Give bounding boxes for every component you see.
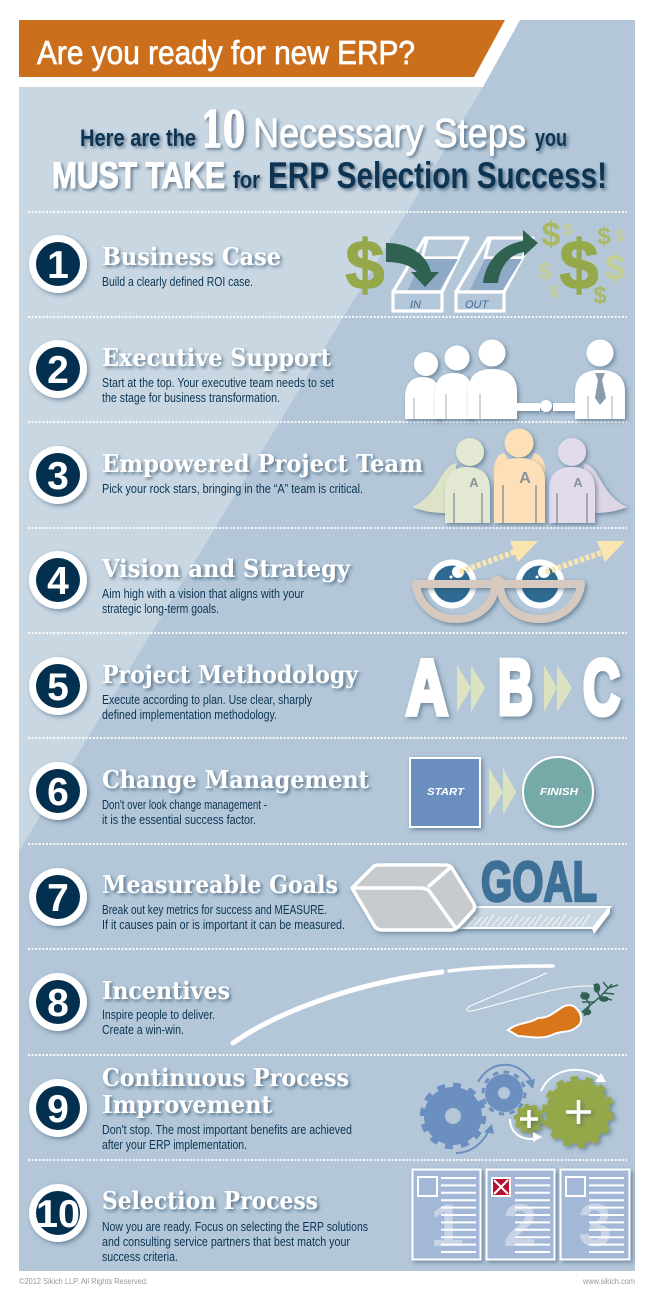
title banner xyxy=(19,20,505,77)
step 2 text: 2 xyxy=(47,349,69,392)
step 9 text: after your ERP implementation. xyxy=(102,1138,247,1152)
icon: superhero team xyxy=(412,428,627,523)
icon: money in and out: OUT xyxy=(465,299,490,311)
step 6 text xyxy=(29,762,369,827)
icon: money in and out: $ xyxy=(597,223,611,250)
step 3 text: 3 xyxy=(47,455,69,498)
step 5 text: Execute according to plan. Use clear, sharply xyxy=(102,693,313,707)
icon: start to finish xyxy=(410,757,593,827)
heading: 10 necessary steps: for xyxy=(233,167,260,194)
step 2 text: the stage for business transformation. xyxy=(102,391,280,405)
step 10 text: 10 xyxy=(36,1193,80,1236)
step 7 text: 7 xyxy=(47,877,69,920)
heading: 10 necessary steps xyxy=(52,100,607,196)
step 5 text: Project Methodology xyxy=(102,660,359,689)
icon: money in and out: $ xyxy=(346,226,384,304)
step 8 text: Create a win-win. xyxy=(102,1023,184,1037)
step 10 text: Selection Process xyxy=(102,1186,318,1215)
step 5 text: defined implementation methodology. xyxy=(102,708,277,722)
icon: money in and out: $ xyxy=(616,228,625,245)
step 4 text: Aim high with a vision that aligns with your xyxy=(102,587,304,601)
step 1 text: 1 xyxy=(47,244,69,287)
icon: money in and out: IN xyxy=(410,299,421,311)
step 8 text xyxy=(29,973,230,1037)
icon: start to finish: START xyxy=(427,787,465,798)
step 4 text: Vision and Strategy xyxy=(101,554,351,583)
icon: gears with plus signs xyxy=(422,1065,612,1153)
step 7 text xyxy=(29,868,345,932)
step 8 text: 8 xyxy=(47,982,69,1025)
icon: three documents: 3 xyxy=(578,1192,612,1259)
step 3 text: Pick your rock stars, bringing in the “A” team is critical. xyxy=(102,482,363,496)
icon: executives shaking hands xyxy=(405,340,625,419)
icon: three documents: 2 xyxy=(503,1192,537,1259)
step 6 text: 6 xyxy=(47,771,69,814)
step 3 text: Empowered Project Team xyxy=(102,449,423,478)
step 3 text xyxy=(29,446,423,504)
step 4 text: strategic long-term goals. xyxy=(102,602,219,616)
footer copyright: ©2012 Sikich LLP. All Rights Reserved. xyxy=(19,1277,148,1286)
icon: A B C steps: A xyxy=(406,643,448,731)
icon: A B C steps xyxy=(406,643,620,731)
step 2 text xyxy=(29,340,334,405)
step 10 text: and consulting service partners that best match your xyxy=(102,1235,350,1249)
icon: superhero team: A xyxy=(573,475,583,490)
step 10 text: Now you are ready. Focus on selecting the ERP solutions xyxy=(102,1220,368,1234)
step 9 text: Improvement xyxy=(102,1090,272,1119)
icon: glasses with eyes looking up xyxy=(416,541,625,619)
icon: superhero team: A xyxy=(469,475,479,490)
step 10 text xyxy=(29,1184,368,1264)
icon: money in and out: $ xyxy=(542,216,561,254)
step 8 text: Incentives xyxy=(102,976,230,1005)
icon: three documents xyxy=(412,1170,630,1260)
step 5 text xyxy=(29,657,359,722)
step 4 text xyxy=(29,551,351,616)
step 7 text: Break out key metrics for success and MEASURE. xyxy=(102,903,327,917)
step 7 text: Measureable Goals xyxy=(102,870,338,899)
step 9 text: Continuous Process xyxy=(102,1063,349,1092)
icon: A B C steps: C xyxy=(583,643,620,731)
icon: money in and out: $ xyxy=(560,226,598,304)
icon: A B C steps: B xyxy=(498,643,533,731)
icon: money in and out: $ xyxy=(550,284,559,301)
step 8 text: Inspire people to deliver. xyxy=(102,1008,215,1022)
step 1 text: Business Case xyxy=(102,242,281,271)
step 7 text: If it causes pain or is important it can be measured. xyxy=(102,918,345,932)
icon: carrot on a stick swoosh xyxy=(233,966,618,1043)
step 4 text: 4 xyxy=(47,560,69,603)
heading: 10 necessary steps: Necessary Steps xyxy=(253,110,526,156)
icon: superhero team: A xyxy=(519,470,531,487)
footer website: www.sikich.com xyxy=(582,1277,635,1286)
heading: 10 necessary steps: 10 xyxy=(201,100,245,159)
step 1 text: Build a clearly defined ROI case. xyxy=(102,275,253,289)
icon: three documents: 1 xyxy=(430,1192,464,1259)
icon: money in and out: $ xyxy=(538,258,552,285)
step 9 text: Don't stop. The most important benefits are achieved xyxy=(102,1123,352,1137)
icon: money in and out: $ xyxy=(605,247,625,288)
step 2 text: Executive Support xyxy=(102,343,331,372)
heading: 10 necessary steps: you xyxy=(535,125,567,152)
heading: 10 necessary steps: Here are the xyxy=(80,125,196,152)
icon: start to finish: FINISH xyxy=(540,787,579,798)
step 6 text: Change Management xyxy=(102,765,369,794)
icon: eraser pushing toward goal xyxy=(352,850,610,934)
step 9 text xyxy=(29,1063,352,1152)
step 6 text: it is the essential success factor. xyxy=(102,813,256,827)
step 5 text: 5 xyxy=(47,666,69,709)
step 6 text: Don't over look change management - xyxy=(102,798,267,812)
step 2 text: Start at the top. Your executive team needs to set xyxy=(102,376,334,390)
icon: eraser pushing toward goal: GOAL xyxy=(481,850,597,914)
step 10 text: success criteria. xyxy=(102,1250,178,1264)
icon: money in and out: $ xyxy=(563,220,573,239)
step 1 text xyxy=(29,235,281,293)
heading: 10 necessary steps: MUST TAKE xyxy=(52,155,225,196)
step 9 text: 9 xyxy=(47,1088,69,1131)
title banner: Are you ready for new ERP? xyxy=(37,34,415,71)
icon: money in and out xyxy=(346,216,625,311)
icon: money in and out: $ xyxy=(593,282,607,309)
